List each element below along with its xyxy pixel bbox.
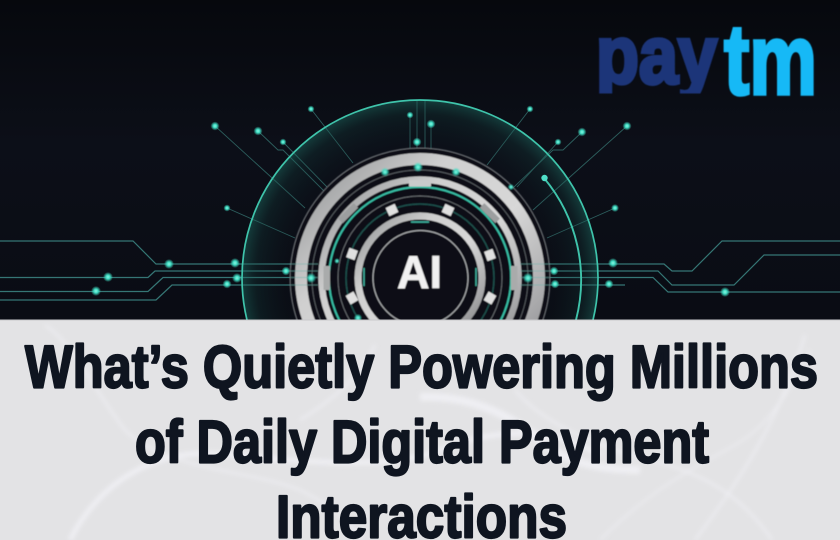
horizontal lines crossing the silver ring: [290, 264, 550, 285]
radial connector lines: [215, 100, 627, 238]
teal inner ring: [329, 187, 511, 369]
Paytm logo: [598, 26, 814, 98]
thin dark ring: [312, 170, 528, 386]
title line 2: of Daily Digital Payment: [135, 408, 709, 476]
glowing circuit nodes: [91, 106, 730, 297]
logo word: pay: pay: [596, 10, 717, 101]
teal arc with end node: [541, 175, 581, 320]
outer ring blocks: [324, 180, 518, 290]
light title panel: [0, 320, 840, 540]
core background disc: [290, 148, 550, 408]
inner ring blocks: [346, 204, 496, 305]
thin outer ring: [290, 148, 550, 408]
faint teal ring: [346, 204, 494, 352]
large silver ring: [301, 159, 539, 397]
title: [25, 334, 818, 540]
inner silver ring: [358, 216, 482, 340]
second silver ring: [322, 180, 518, 376]
AI core emblem: [290, 148, 550, 408]
circuit lines left: [0, 241, 320, 300]
dark technology background: [0, 0, 840, 320]
circuit lines right: [520, 241, 840, 292]
nodes across rings: [306, 162, 533, 322]
AI label: AI: [397, 246, 442, 298]
thin circle around AI: [373, 230, 468, 326]
small teal tick marks: [364, 222, 476, 286]
outer teal ring with halo: [242, 100, 598, 456]
thin grey ring: [338, 196, 502, 360]
soft white wave pattern: [45, 325, 810, 540]
